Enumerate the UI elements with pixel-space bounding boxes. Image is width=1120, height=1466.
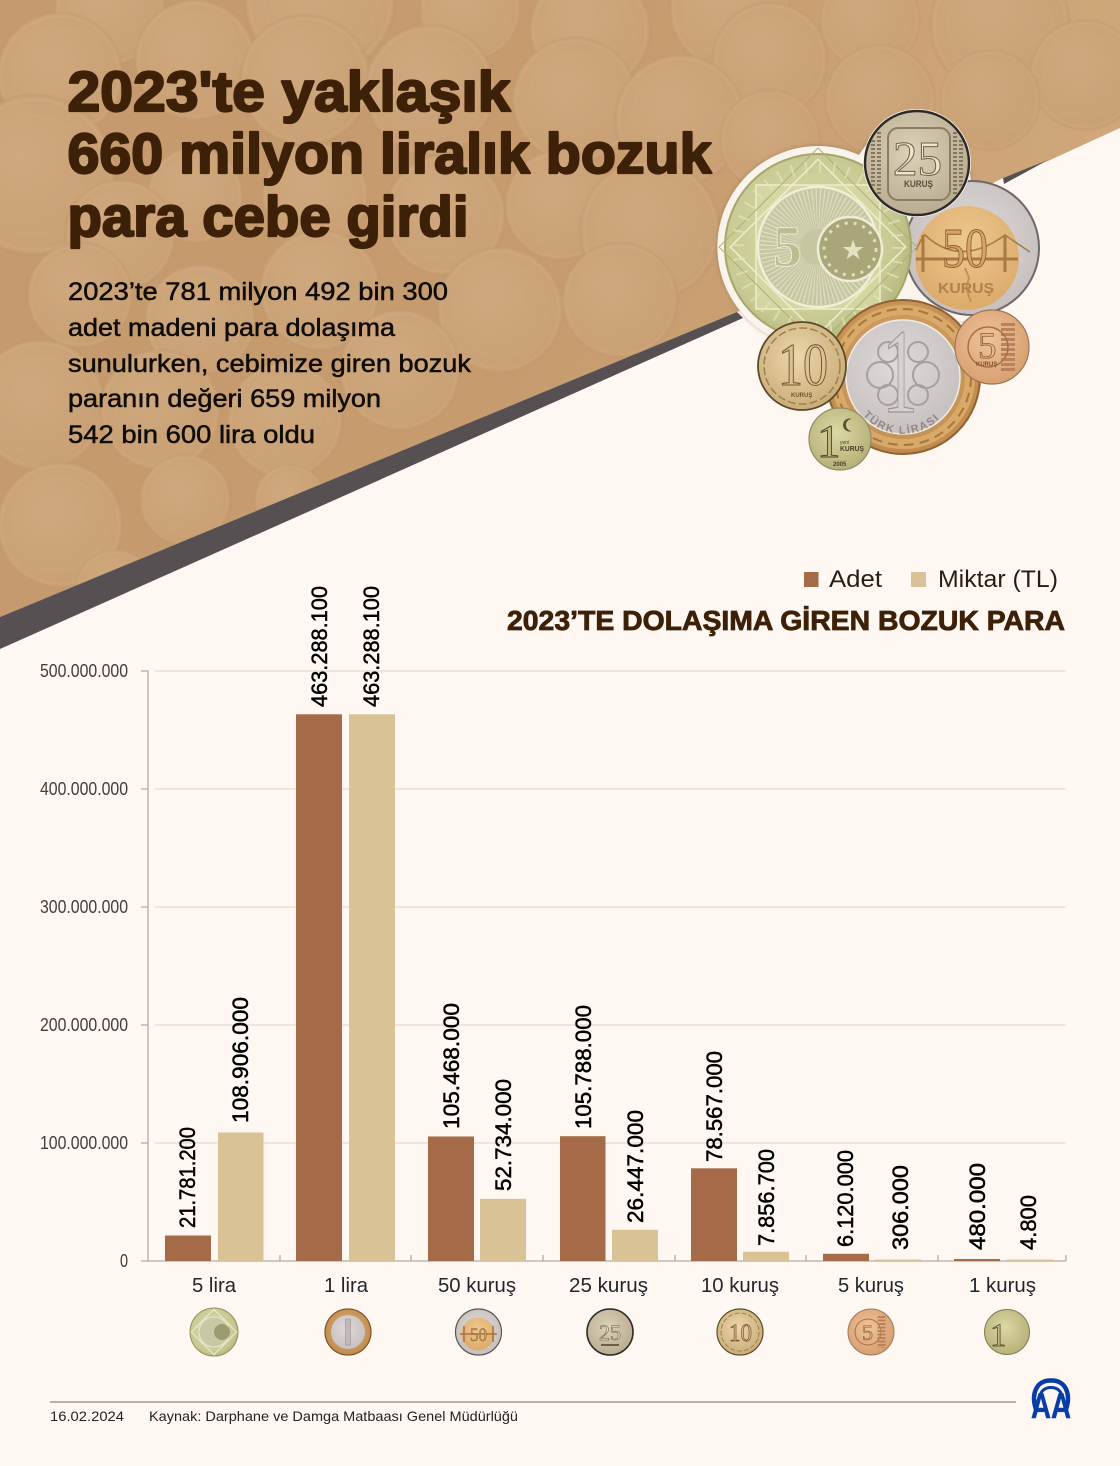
legend item: Miktar (TL): Miktar (TL) (938, 566, 1058, 593)
coin: 25 kuruş: KURUŞ (904, 179, 933, 189)
coin: 5 kuruş (955, 310, 1029, 384)
bar value labels: 6.120.000 (833, 1150, 858, 1247)
y axis labels: 200.000.000 (40, 1015, 128, 1035)
intro text: adet madeni para dolaşıma (68, 314, 395, 342)
icon: 50 kuruş coin: 50 (470, 1325, 487, 1346)
bar value labels: 52.734.000 (491, 1079, 516, 1191)
coin: 1 lira (829, 299, 981, 455)
coin: 1 kuruş (809, 408, 871, 470)
icon: AA logo (1031, 1380, 1071, 1426)
bar value labels: 78.567.000 (702, 1051, 727, 1162)
y axis labels: 500.000.000 (40, 661, 128, 681)
coin: 1 kuruş: yeni (840, 440, 849, 446)
icon: 1 lira coin (325, 1309, 371, 1355)
bar value labels: 463.288.100 (359, 586, 384, 707)
bar value labels: 7.856.700 (754, 1149, 779, 1246)
footer date: 16.02.2024 (50, 1408, 124, 1424)
coin: 5 kuruş: KURUŞ (976, 362, 997, 368)
bar value labels: 105.788.000 (571, 1005, 596, 1129)
category labels: 5 kuruş (838, 1274, 904, 1297)
icon: 5 lira coin (190, 1308, 238, 1356)
footer rule (50, 1401, 1016, 1403)
title: 660 milyon liralık bozuk (68, 122, 712, 186)
icon: 5 kuruş coin (848, 1309, 894, 1355)
icon: 10 kuruş coin: 10 (729, 1320, 752, 1347)
bar value labels: 21.781.200 (175, 1127, 200, 1228)
coin: 25 kuruş: 25 (893, 131, 942, 186)
category labels: 1 lira (324, 1274, 369, 1297)
coin: 5 kuruş: 5 (978, 326, 996, 367)
y axis labels: 300.000.000 (40, 897, 128, 917)
small coin icons row (190, 1308, 1030, 1356)
bars: Miktar (218, 714, 1053, 1261)
bar value labels: 480.000 (965, 1163, 990, 1250)
legend (804, 566, 1058, 593)
y axis labels: 100.000.000 (40, 1133, 128, 1153)
y axis labels: 0 (120, 1251, 128, 1271)
icon: AA logo: AA (1031, 1387, 1071, 1426)
coin: 10 kuruş: 10 (778, 332, 828, 398)
icon: 25 kuruş coin (587, 1309, 633, 1355)
icon: 5 kuruş coin: 5 (862, 1320, 873, 1345)
coin: 10 kuruş: KURUŞ (791, 393, 812, 399)
panel: coin texture header background (0, 0, 1120, 630)
coin: 50 kuruş: KURUŞ (938, 280, 994, 297)
coin: 5 lira (719, 148, 917, 346)
coin: 1 kuruş: KURUŞ (840, 446, 864, 453)
bar value labels: 26.447.000 (623, 1110, 648, 1223)
coin: 1 lira: TÜRK LİRASI (864, 410, 938, 434)
legend item: Adet: Adet (829, 566, 882, 593)
category labels (192, 1274, 1036, 1297)
bar value labels (175, 586, 1041, 1250)
coin: 50 kuruş: 50 (942, 218, 988, 280)
intro text: sunulurken, cebimize giren bozuk (68, 350, 472, 378)
bars: Adet (165, 714, 1000, 1261)
category labels: 25 kuruş (569, 1274, 648, 1297)
footer source: Kaynak: Darphane ve Damga Matbaası Genel Müdürlüğü (149, 1408, 518, 1424)
category labels: 10 kuruş (701, 1274, 779, 1297)
coin: 10 kuruş (758, 322, 846, 410)
coin: 1 lira: 1 (882, 305, 918, 439)
title (68, 60, 712, 249)
y axis labels (40, 661, 128, 1271)
coin halo (717, 125, 1025, 348)
coin: 5 lira: ★ (841, 235, 865, 265)
intro text: paranın değeri 659 milyon (68, 385, 381, 413)
bar value labels: 108.906.000 (228, 997, 253, 1123)
icon: 50 kuruş coin (456, 1309, 502, 1355)
dark diagonal band (0, 312, 743, 649)
coin cluster illustration (716, 109, 1040, 471)
intro text: 542 bin 600 lira oldu (68, 421, 315, 449)
bar value labels: 463.288.100 (307, 586, 332, 707)
coin: 1 kuruş: 2005 (833, 462, 847, 468)
chart heading: 2023’TE DOLAŞIMA GİREN BOZUK PARA (507, 605, 1065, 636)
coin: 25 kuruş (863, 109, 971, 217)
category labels: 50 kuruş (438, 1274, 516, 1297)
icon: 1 kuruş coin (984, 1310, 1030, 1354)
coin: 50 kuruş (905, 181, 1039, 315)
bar value labels: 306.000 (888, 1165, 913, 1250)
coin: 5 lira: 5 (773, 214, 802, 279)
title: para cebe girdi (68, 185, 468, 249)
y axis labels: 400.000.000 (40, 779, 128, 799)
bar value labels: 105.468.000 (439, 1003, 464, 1129)
icon: 1 kuruş coin: 1 (990, 1318, 1006, 1354)
icon: 10 kuruş coin (717, 1309, 763, 1355)
icon: 25 kuruş coin: 25 (599, 1320, 621, 1345)
title: 2023'te yaklaşık (68, 60, 511, 124)
bar value labels: 4.800 (1016, 1195, 1041, 1250)
legend item: Adet (804, 566, 882, 593)
category labels: 5 lira (192, 1274, 237, 1297)
dark diagonal band right part (1003, 160, 1048, 184)
intro text: 2023’te 781 milyon 492 bin 300 (68, 278, 448, 306)
intro text (68, 278, 472, 449)
coin: 1 kuruş: 1 (817, 416, 840, 468)
bar chart (40, 586, 1066, 1297)
category labels: 1 kuruş (969, 1274, 1036, 1297)
